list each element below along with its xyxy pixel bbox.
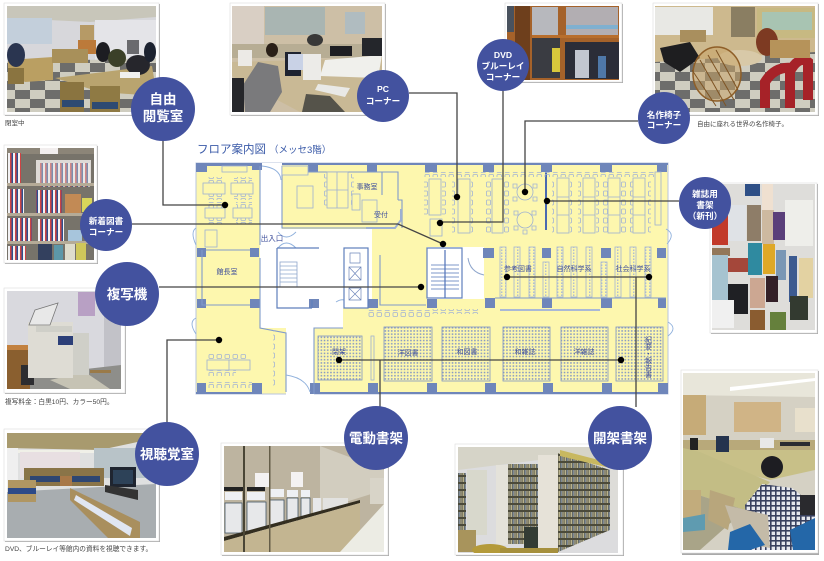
label: free reading room: 閲覧室: [143, 109, 183, 124]
label: PC corner: [357, 70, 409, 122]
floor plan: [192, 163, 673, 396]
stairs and elevators: [277, 248, 484, 308]
room labels: 閉架: [332, 348, 346, 356]
label: new books corner: [80, 199, 132, 251]
label: audiovisual room: [135, 422, 199, 486]
label: PC corner: PC: [377, 84, 389, 94]
open shelves: [500, 247, 651, 297]
photo: magazine rack: [710, 183, 818, 334]
photo: new books shelf: [4, 145, 98, 264]
caption: audiovisual room: DVD、ブルーレイ等館内の資料を視聴できます。: [5, 544, 152, 553]
room labels: 参考図書: [504, 264, 532, 273]
label: compact shelving: [344, 406, 408, 470]
closed stacks: [318, 327, 663, 381]
photo: DVD shelves: [505, 3, 623, 83]
lower-left room furniture: [207, 330, 279, 388]
label: DVD and Blu-ray corner: [477, 39, 529, 91]
floor area: [196, 163, 668, 396]
label: copier: 複写機: [107, 286, 148, 302]
label: magazine shelves: 書架: [696, 199, 714, 210]
label: PC corner: コーナー: [366, 96, 400, 106]
label: DVD and Blu-ray corner: ブルーレイ: [482, 60, 524, 71]
photo: open stacks: [455, 444, 624, 556]
photo: copier: [4, 288, 126, 394]
room walls: [202, 166, 666, 394]
photo: large reading room: [681, 370, 822, 555]
room labels: 受付: [374, 210, 388, 219]
label: new books corner: コーナー: [89, 227, 123, 237]
caption: masterpiece chairs: 自由に座れる世界の名作椅子。: [697, 119, 788, 128]
label: masterpiece chair corner: 名作椅子: [647, 109, 682, 120]
label: masterpiece chair corner: [638, 92, 690, 144]
label: masterpiece chair corner: コーナー: [647, 120, 681, 130]
label: magazine shelves: （新刊）: [688, 210, 722, 221]
label: free reading room: [131, 77, 195, 141]
seats along corridor: [368, 309, 600, 317]
room labels: 洋雑誌: [574, 347, 594, 356]
room labels: [216, 182, 652, 379]
photo: compact shelving: [221, 443, 389, 556]
photo: PC corner: [230, 3, 386, 116]
label: audiovisual room: 視聴覚室: [140, 446, 194, 462]
label: magazine shelves: [679, 177, 731, 229]
label: copier: [95, 262, 159, 326]
label: open stacks: [588, 406, 652, 470]
photo: audiovisual room: [4, 429, 160, 542]
pillars and walls: [196, 163, 668, 394]
room labels: 洋図書: [398, 348, 418, 357]
room labels: 社会科学系: [616, 264, 650, 273]
label: free reading room: 自由: [150, 91, 176, 107]
label: DVD and Blu-ray corner: コーナー: [486, 72, 520, 82]
room labels: 和図書: [456, 347, 478, 356]
location dots: [216, 189, 652, 363]
label: new books corner: 新着図書: [89, 215, 124, 226]
leader lines: [132, 91, 679, 423]
doors: [192, 166, 673, 392]
reading tables: [424, 172, 661, 236]
room labels: 出入口: [261, 233, 283, 243]
caption: closed room: 閉室中: [5, 118, 24, 127]
room labels: 館長室: [216, 267, 238, 276]
room labels: 事務室: [356, 182, 378, 191]
room labels: 自然科学系: [556, 264, 592, 273]
room labels: 和雑誌: [514, 347, 536, 356]
top-left room tables: [203, 166, 253, 247]
office furniture: [282, 166, 401, 228]
heading: floor guide: フロア案内図 （メッセ3階）: [197, 142, 331, 156]
caption: copy fees: 複写料金：白黒10円、カラー50円。: [5, 397, 114, 406]
label: compact shelving: 電動書架: [349, 430, 403, 446]
label: DVD and Blu-ray corner: DVD: [494, 50, 512, 60]
photo: free reading room: [4, 3, 160, 116]
label: magazine shelves: 雑誌用: [692, 188, 718, 199]
photo: masterpiece chairs: [653, 3, 819, 116]
label: open stacks: 開架書架: [593, 430, 647, 446]
room labels: 紀要・報告書: [644, 335, 652, 379]
